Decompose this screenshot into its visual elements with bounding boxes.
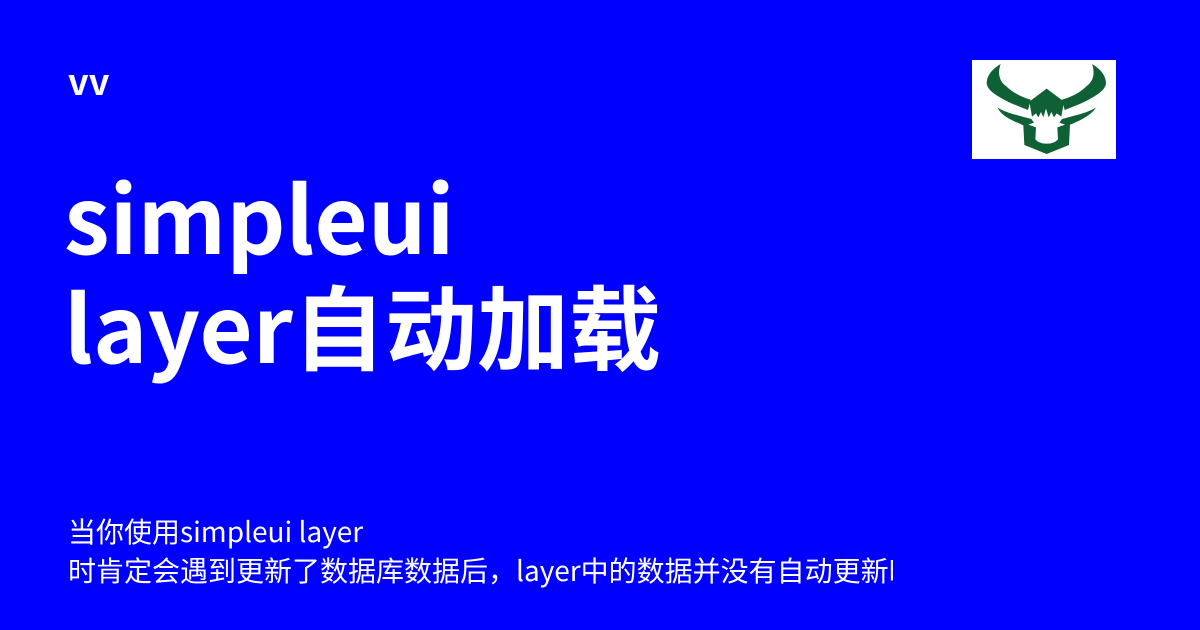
description text [68, 512, 893, 590]
description text: 当你使用simpleui layer [68, 512, 363, 551]
title: simpleui [64, 148, 454, 281]
author name: vv [68, 54, 109, 106]
title [64, 148, 661, 390]
icon: green bull logo [972, 60, 1116, 159]
title: layer自动加载 [64, 257, 661, 390]
